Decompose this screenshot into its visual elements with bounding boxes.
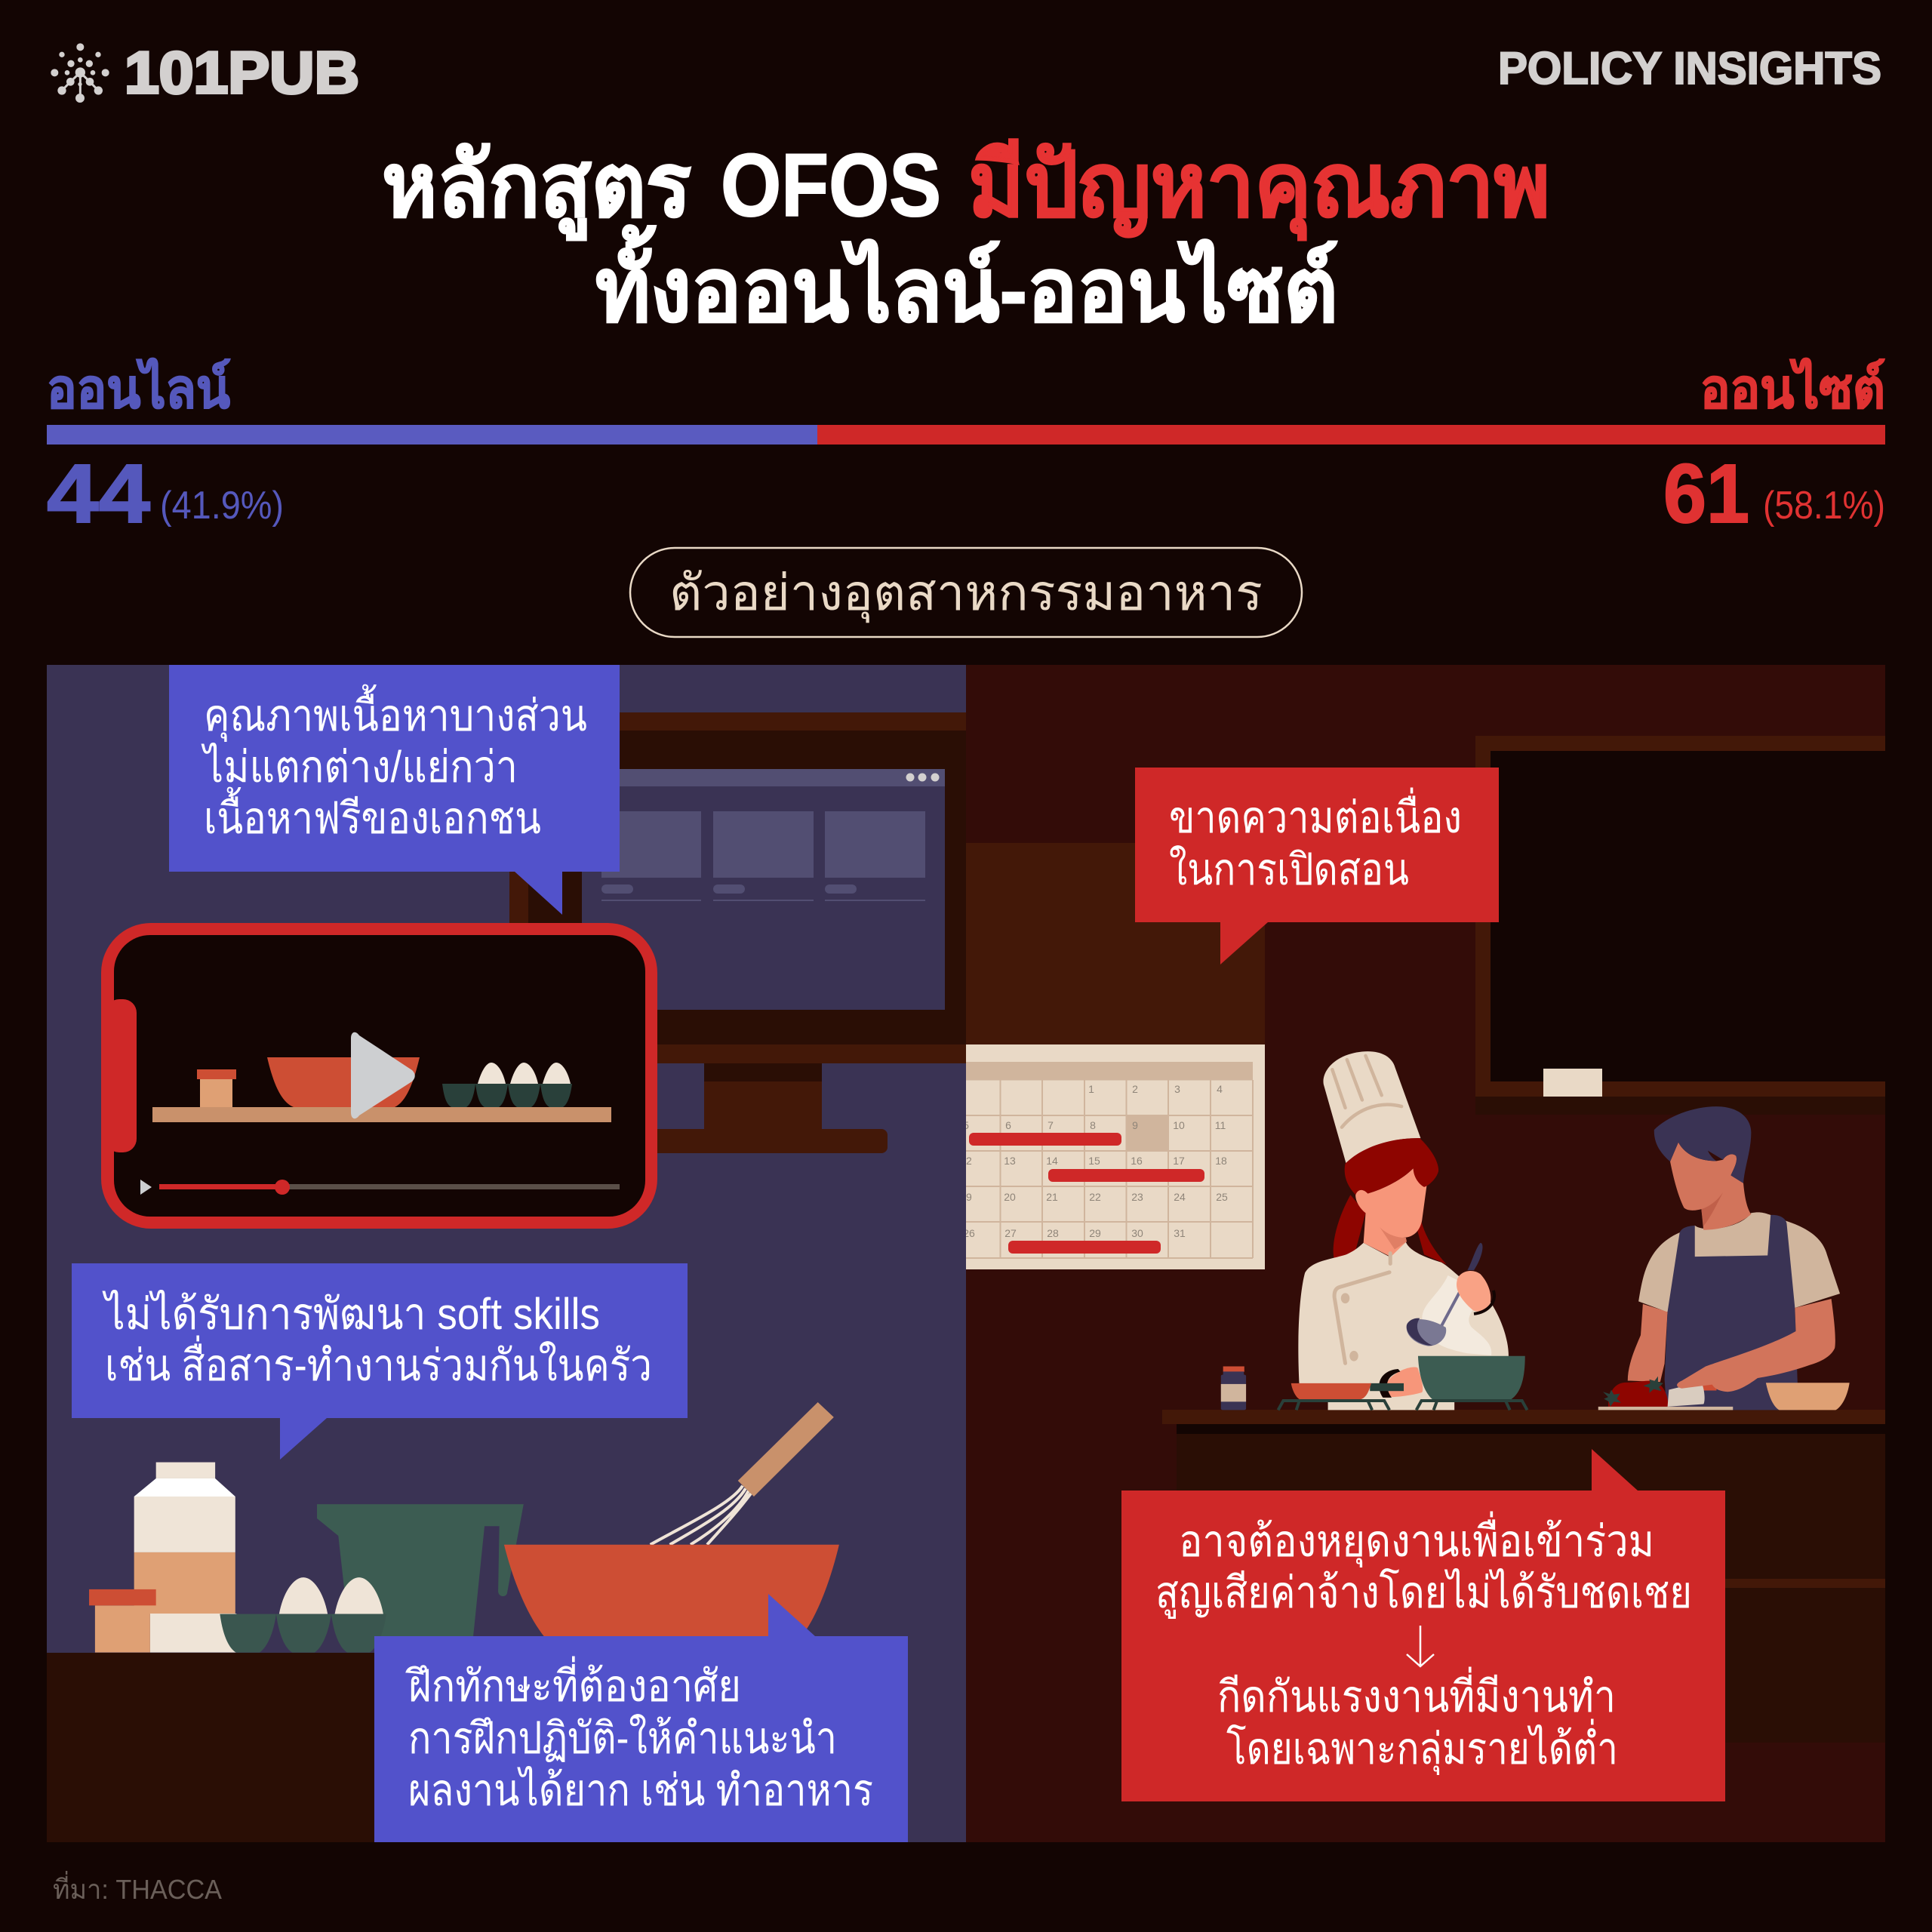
chef — [1298, 1051, 1509, 1410]
calendar — [958, 1044, 1265, 1269]
chef other hand — [1387, 1367, 1423, 1397]
cook — [1598, 1106, 1840, 1410]
callout: lost wages: โดยเฉพาะกลุ่มรายได้ต่ำ — [1226, 1718, 1618, 1776]
cook hair — [1654, 1106, 1751, 1183]
ladle — [1407, 1243, 1482, 1346]
calendar dates: 2 — [1132, 1083, 1138, 1095]
callout: lack of continuity: ในการเปิดสอน — [1169, 844, 1409, 894]
onsite count: 61 — [1663, 448, 1749, 540]
video: jar — [197, 1069, 236, 1107]
logo wordmark: 101PUB — [125, 39, 359, 106]
wall block — [966, 843, 1265, 1044]
steam — [1422, 1275, 1491, 1355]
calendar dates: 30 — [1131, 1227, 1143, 1239]
calendar dates: 26 — [963, 1227, 975, 1239]
knife — [1668, 1382, 1716, 1407]
label: policy insights: POLICY INSIGHTS — [1498, 43, 1881, 94]
callout: soft skills: เช่น สื่อสาร-ทำงานร่วมกันในครัว — [105, 1335, 652, 1390]
video: cups and eggs — [442, 1063, 572, 1107]
calendar dates: 6 — [1005, 1119, 1011, 1131]
tomatoes — [1603, 1377, 1668, 1407]
calendar dates: 22 — [1089, 1191, 1101, 1203]
title line 1 red: มีปัญหาคุณภาพ — [968, 136, 1550, 241]
online label: ออนไลน์ — [47, 357, 231, 420]
chalkboard — [1475, 736, 1885, 1115]
panel: onsite — [958, 665, 1885, 1842]
video: bowl — [267, 1057, 420, 1107]
calendar dates: 4 — [1217, 1083, 1223, 1095]
chef hair — [1345, 1138, 1438, 1195]
pot on stove — [1417, 1356, 1527, 1410]
calendar dates: 17 — [1173, 1155, 1185, 1167]
calendar dates: 12 — [960, 1155, 972, 1167]
jar — [89, 1589, 156, 1653]
calendar dates: 20 — [1004, 1191, 1016, 1203]
icon: logo dots — [51, 43, 109, 103]
calendar dates: 29 — [1089, 1227, 1101, 1239]
online percent: (41.9%) — [160, 484, 284, 528]
online bar — [47, 425, 817, 445]
callout: practical skills — [374, 1594, 908, 1842]
callout: content quality — [169, 665, 620, 915]
illustration: computer monitor — [509, 712, 966, 1153]
calendar dates: 3 — [1174, 1083, 1180, 1095]
calendar dates: 28 — [1047, 1227, 1059, 1239]
video: play button — [351, 1032, 415, 1118]
callout: content quality: ไม่แตกต่าง/แย่กว่า — [201, 742, 518, 792]
mixing bowl — [504, 1545, 839, 1641]
cook right arm — [1677, 1299, 1835, 1392]
onsite bar — [817, 425, 1885, 445]
title line 1 white thai: หลักสูตร — [382, 136, 691, 241]
cook apron — [1665, 1215, 1798, 1410]
calendar dates: 24 — [1174, 1191, 1186, 1203]
calendar dates: 8 — [1090, 1119, 1096, 1131]
calendar dates: 31 — [1174, 1227, 1186, 1239]
onsite percent: (58.1%) — [1763, 484, 1885, 528]
calendar dates — [960, 1083, 1228, 1239]
callout: lost wages: สูญเสียค่าจ้างโดยไม่ได้รับชดเชย — [1155, 1567, 1692, 1619]
pan on stove — [1278, 1383, 1404, 1410]
kitchen counter and cabinet — [1162, 1410, 1885, 1743]
callout: practical skills: การฝึกปฏิบัติ-ให้คำแนะนำ — [408, 1713, 837, 1763]
chef hat — [1323, 1051, 1420, 1164]
calendar dates: 18 — [1215, 1155, 1227, 1167]
calendar dates: 13 — [1004, 1155, 1016, 1167]
calendar dates: 11 — [1215, 1119, 1226, 1131]
cook left arm — [1628, 1304, 1668, 1382]
calendar dates: 16 — [1131, 1155, 1143, 1167]
video: shelf — [152, 1107, 611, 1122]
illustration: counter — [47, 1653, 424, 1842]
callout: content quality: เนื้อหาฟรีของเอกชน — [204, 787, 541, 843]
chef jacket — [1298, 1242, 1509, 1410]
callout: content quality: คุณภาพเนื้อหาบางส่วน — [204, 685, 587, 743]
calendar dates: 1 — [1088, 1083, 1094, 1095]
calendar dates: 14 — [1046, 1155, 1058, 1167]
illustration: baking ingredients — [89, 1402, 839, 1653]
calendar dates: 19 — [960, 1191, 972, 1203]
video: progress bar — [140, 1180, 620, 1195]
calendar dates: 15 — [1088, 1155, 1100, 1167]
comparison bar: online vs onsite — [47, 357, 1885, 540]
callout: lost wages: กีดกันแรงงานที่มีงานทำ — [1217, 1666, 1616, 1721]
cook neck and face — [1670, 1143, 1751, 1230]
whisk — [651, 1402, 834, 1545]
callout: lack of continuity — [1135, 768, 1499, 964]
calendar dates: 5 — [963, 1119, 969, 1131]
callout: lack of continuity: ขาดความต่อเนื่อง — [1169, 787, 1462, 842]
spice bottle — [1221, 1366, 1246, 1410]
calendar dates: 25 — [1216, 1191, 1228, 1203]
measuring jug — [317, 1504, 524, 1641]
pill: food industry example — [630, 548, 1302, 637]
onsite label: ออนไซต์ — [1700, 357, 1885, 420]
cutting board — [1598, 1407, 1733, 1410]
chef hair back — [1334, 1195, 1447, 1264]
callout: practical skills: ฝึกทักษะที่ต้องอาศัย — [405, 1656, 741, 1711]
arrow — [1407, 1626, 1434, 1666]
calendar dates: 21 — [1046, 1191, 1058, 1203]
callout: soft skills — [72, 1263, 688, 1460]
calendar dates: 10 — [1173, 1119, 1185, 1131]
illustration: phone with cooking video — [101, 923, 657, 1229]
logo: 101PUB — [51, 39, 359, 106]
callout: lost wages: อาจต้องหยุดงานเพื่อเข้าร่วม — [1179, 1511, 1654, 1568]
source: ที่มา: THACCA — [53, 1871, 222, 1905]
chef face — [1355, 1168, 1426, 1257]
calendar dates: 27 — [1004, 1227, 1017, 1239]
online count: 44 — [47, 448, 150, 540]
calendar dates: 7 — [1048, 1119, 1054, 1131]
calendar dates: 23 — [1131, 1191, 1143, 1203]
title line 2: ทั้งออนไลน์-ออนไซต์ — [595, 225, 1338, 340]
milk carton — [134, 1463, 236, 1653]
chef hand with ladle — [1457, 1271, 1491, 1312]
title line 1 OFOS: OFOS — [721, 136, 941, 235]
callout: practical skills: ผลงานได้ยาก เช่น ทำอาหาร — [408, 1765, 873, 1815]
title — [382, 136, 1550, 340]
illustration: chef and cook — [1221, 1051, 1850, 1410]
callout: soft skills: ไม่ได้รับการพัฒนา soft skills — [102, 1289, 600, 1339]
calendar highlighted periods — [969, 1133, 1204, 1254]
cook shirt — [1638, 1212, 1840, 1312]
calendar dates: 9 — [1132, 1119, 1138, 1131]
callout: lost wages — [1121, 1449, 1725, 1801]
pill: food industry example: ตัวอย่างอุตสาหกรรมอาหาร — [669, 565, 1263, 623]
eggs in cups — [220, 1577, 386, 1653]
small bowl — [1766, 1383, 1850, 1410]
panel: online — [47, 665, 966, 1842]
